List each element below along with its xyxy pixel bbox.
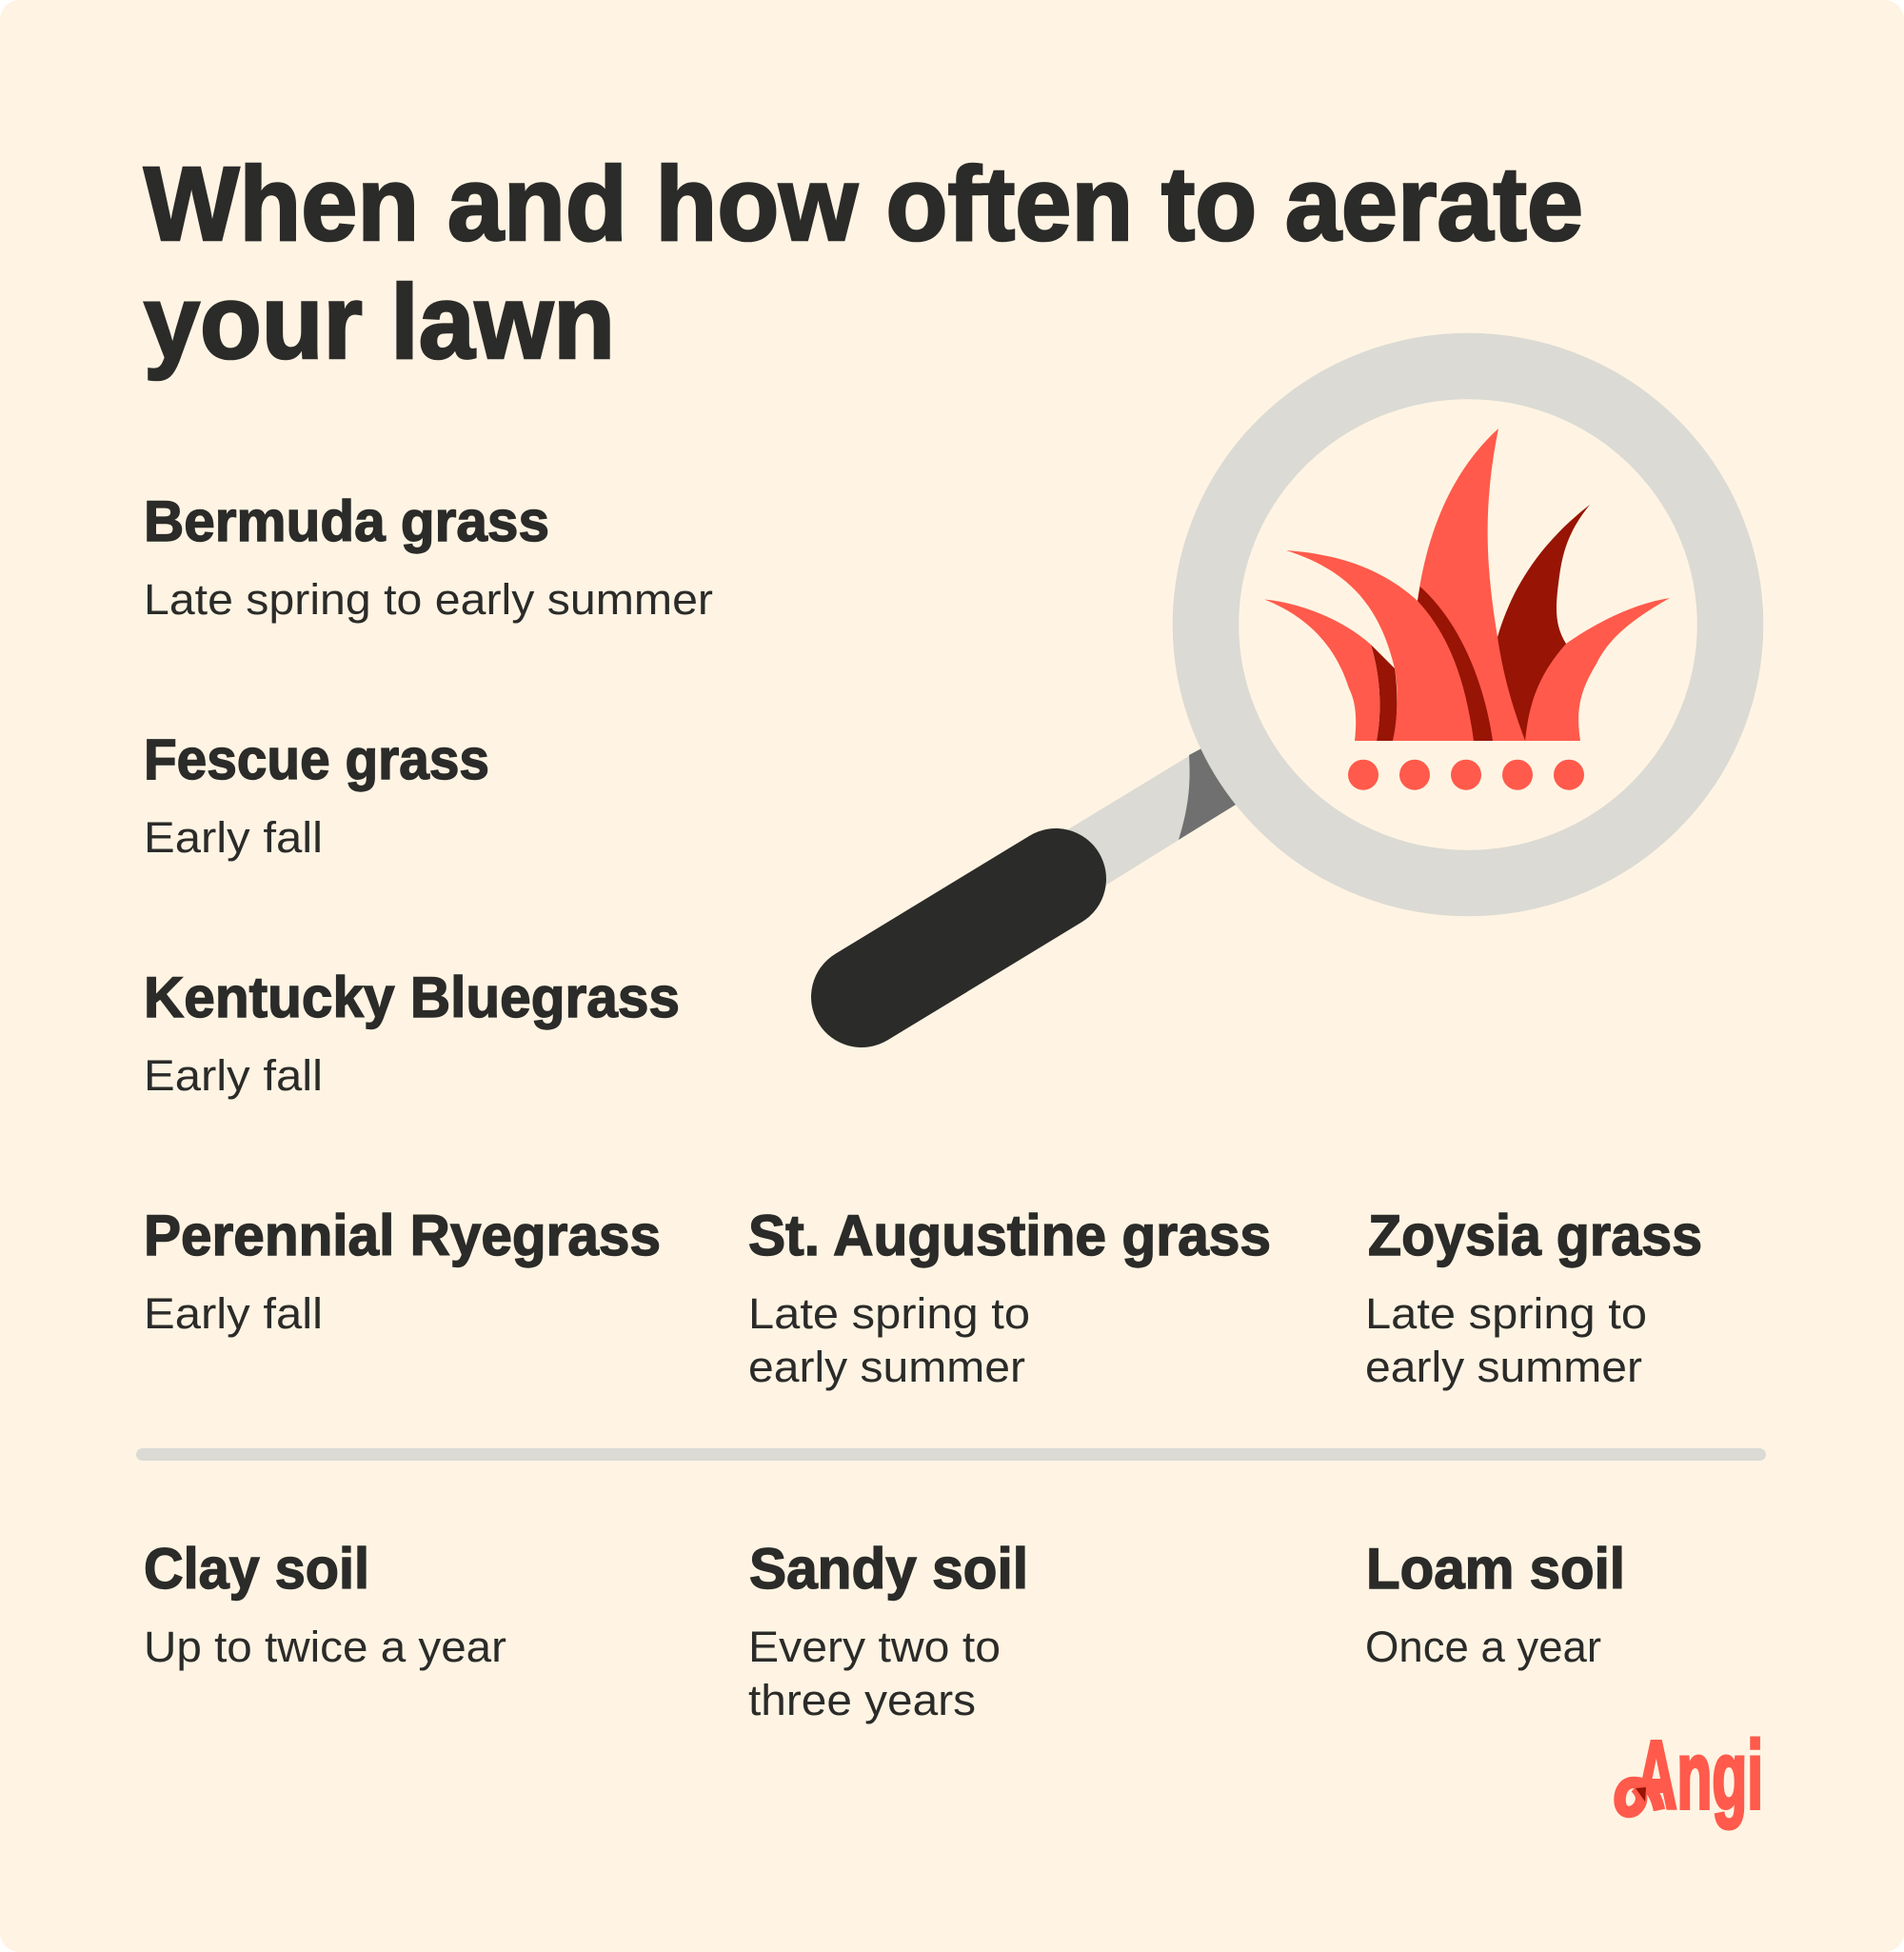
entry: Sandy soil: Every two to xyxy=(748,1623,1001,1671)
magnifier shaft xyxy=(1068,748,1236,886)
entry: Perennial Ryegrass: Perennial Ryegrass xyxy=(144,1204,661,1267)
magnifier shaft shadow xyxy=(1179,748,1236,840)
entry: Kentucky Bluegrass: Early fall xyxy=(144,1051,323,1100)
entry: Kentucky Bluegrass xyxy=(144,966,680,1100)
entry: Fescue grass: Early fall xyxy=(144,813,323,862)
title: your lawn xyxy=(144,264,615,381)
entry: Clay soil xyxy=(144,1537,506,1671)
entry: Sandy soil xyxy=(748,1537,1028,1724)
entry: Sandy soil: Sandy soil xyxy=(749,1537,1028,1601)
entry: Sandy soil: three years xyxy=(748,1676,976,1724)
icon: magnifying glass over grass xyxy=(862,366,1731,997)
grass tuft xyxy=(1264,428,1670,741)
soil aeration dots xyxy=(1348,760,1584,790)
entry: St. Augustine grass xyxy=(748,1204,1271,1391)
title: When and how often to aerate xyxy=(144,146,1583,263)
entry: Fescue grass xyxy=(144,727,489,862)
entry: Bermuda grass: Late spring to early summer xyxy=(144,575,713,624)
entry: Clay soil: Clay soil xyxy=(144,1537,369,1601)
entry: Perennial Ryegrass: Early fall xyxy=(144,1289,323,1338)
entry: St. Augustine grass: St. Augustine grass xyxy=(748,1204,1271,1267)
entry: Loam soil xyxy=(1365,1537,1625,1671)
logo: Angi: Angi xyxy=(1636,1723,1763,1829)
entry: Zoysia grass xyxy=(1365,1204,1702,1391)
logo: Angi xyxy=(1620,1723,1763,1829)
divider xyxy=(136,1448,1766,1461)
entry: Loam soil: Loam soil xyxy=(1366,1537,1625,1601)
magnifier handle xyxy=(862,879,1056,997)
magnifier lens ring xyxy=(1205,366,1731,884)
entry: St. Augustine grass: Late spring to xyxy=(748,1289,1030,1338)
entry: Perennial Ryegrass xyxy=(144,1204,661,1338)
entry: Bermuda grass xyxy=(144,489,713,624)
entry: Zoysia grass: early summer xyxy=(1365,1343,1642,1391)
entry: Fescue grass: Fescue grass xyxy=(144,727,489,791)
entry: Loam soil: Once a year xyxy=(1365,1623,1601,1671)
title xyxy=(144,146,1583,381)
entry: Kentucky Bluegrass: Kentucky Bluegrass xyxy=(144,966,680,1029)
entry: Zoysia grass: Zoysia grass xyxy=(1368,1204,1702,1267)
entry: Clay soil: Up to twice a year xyxy=(144,1623,506,1671)
entry: St. Augustine grass: early summer xyxy=(748,1343,1025,1391)
entry: Bermuda grass: Bermuda grass xyxy=(144,489,549,553)
entry: Zoysia grass: Late spring to xyxy=(1365,1289,1647,1338)
